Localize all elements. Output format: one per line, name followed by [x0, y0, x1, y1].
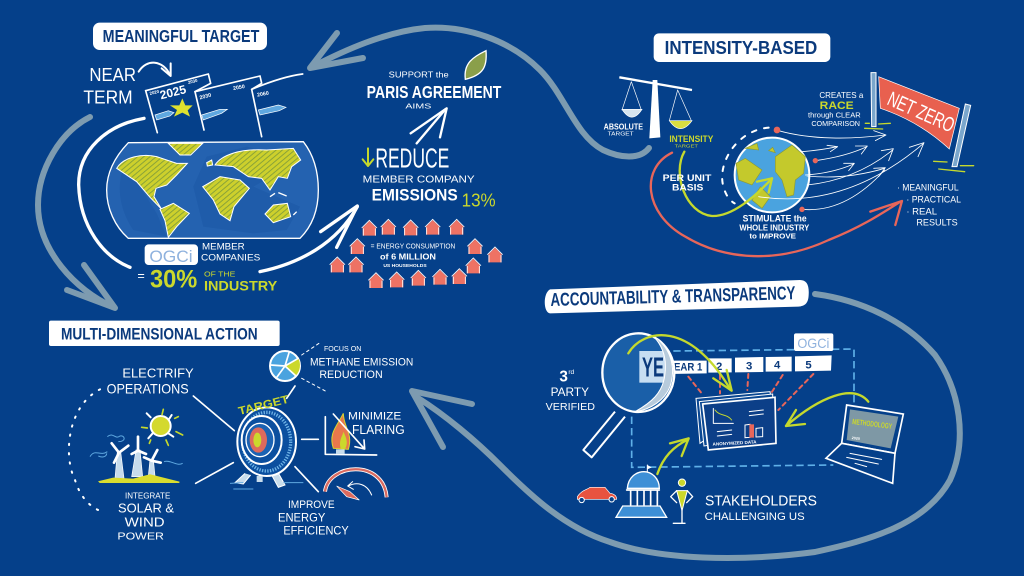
text: electrify operations: OPERATIONS [107, 381, 189, 397]
icon: magnifying glass [583, 333, 674, 457]
text: creates a race through clear comparison: RACE [820, 100, 854, 112]
dashed process box [632, 349, 854, 467]
icon: leaf [465, 51, 486, 79]
dashed orbit [722, 128, 769, 203]
text: improve energy efficiency: EFFICIENCY [283, 524, 349, 538]
title: Accountability & Transparency: ACCOUNTABILITY & TRANSPARENCY [550, 282, 796, 310]
text: member companies: MEMBER [202, 241, 245, 251]
text: meaningful practical real results: RESULTS [916, 218, 958, 228]
text: 3rd party verified [546, 369, 595, 413]
text: intensity target: TARGET [675, 144, 698, 150]
icon: signpost timeline flags: 2030 [199, 93, 212, 101]
text: support the Paris Agreement aims [367, 70, 501, 111]
text: support the Paris Agreement aims: AIMS [405, 102, 431, 111]
icon: signpost timeline flags: 2030 [187, 78, 198, 85]
timeline years: 2 [716, 361, 722, 373]
text: creates a race through clear comparison: COMPARISON [811, 121, 860, 128]
text: focus on methane emission reduction: METHANE EMISSION [310, 357, 413, 369]
text: 3rd party verified: VERIFIED [546, 402, 595, 413]
text: electrify operations: ELECTRIFY [122, 365, 194, 380]
arrow: up to Paris Agreement [411, 108, 447, 143]
arrow: grey loop from Accountability to Multi-Dimensional Action [412, 294, 960, 558]
text: 30% of the industry: INDUSTRY [204, 278, 278, 294]
text: energy consumption: of 6 MILLION [380, 252, 436, 262]
text: electrify operations [107, 365, 194, 397]
text: absolute target [604, 121, 643, 138]
timeline years: 4 [774, 360, 781, 372]
icon: report stack: ANONYMIZED DATA [712, 439, 758, 447]
text: improve energy efficiency [278, 499, 349, 538]
icon: balance scale [619, 77, 692, 138]
title: Accountability & Transparency [545, 280, 809, 313]
icon: signpost timeline flags: 2025 [158, 82, 188, 102]
text: near term: NEAR [89, 64, 136, 85]
text: member companies: COMPANIES [201, 252, 260, 262]
icon: sun [142, 409, 183, 445]
text: meaningful practical real results: · REAL [906, 206, 937, 216]
icon: magnifying glass: YE [642, 352, 664, 383]
title: Meaningful Target [93, 23, 267, 50]
icon: signpost timeline flags: 2020 [149, 89, 160, 96]
text: improve energy efficiency: ENERGY [278, 510, 325, 524]
flag: Net Zero: NET ZERO [884, 88, 958, 137]
text: support the Paris Agreement aims: PARIS AGREEMENT [367, 82, 501, 102]
logo: OGCI small: OGCi [797, 335, 829, 351]
text: per unit basis: BASIS [672, 182, 703, 192]
text: integrate solar and wind power: INTEGRATE [125, 491, 170, 500]
arrows: white race arrows from globe [759, 131, 924, 210]
arrow: near term to 2025 [139, 63, 171, 76]
text: focus on methane emission reduction [310, 344, 413, 381]
text: meaningful practical real results: · PRACTICAL [906, 195, 961, 205]
icon: signpost timeline flags: 2050 [233, 84, 245, 92]
text: meaningful practical real results [897, 183, 961, 228]
icon: houses [330, 219, 503, 288]
dashed red links [688, 374, 813, 410]
arrow: yellow per unit curve [680, 152, 772, 216]
text: minimize flaring: FLARING [352, 423, 405, 437]
title: Multi-Dimensional Action [49, 321, 280, 346]
text: stimulate the whole industry to improve: to IMPROVE [749, 232, 796, 241]
text: energy consumption: = ENERGY CONSUMPTION [371, 244, 455, 251]
text: 3rd party verified: PARTY [551, 385, 589, 399]
text: stimulate the whole industry to improve: WHOLE INDUSTRY [739, 224, 810, 233]
text: support the Paris Agreement aims: SUPPORT the [389, 70, 449, 79]
text: per unit basis [663, 173, 712, 192]
icon: laptop: 2020 [852, 436, 860, 441]
text: per unit basis: PER UNIT [663, 173, 712, 183]
dashed link left [69, 389, 105, 513]
text: energy consumption: US HOUSEHOLDS [383, 263, 427, 268]
timeline years [668, 355, 832, 374]
flag: Net Zero [865, 73, 974, 172]
arrow: yellow from magnifier to report [628, 335, 732, 391]
icon: car [577, 487, 617, 503]
text: 30% of the industry [137, 265, 278, 294]
text: reduce member company emissions 13% [363, 143, 496, 210]
text: minimize flaring [348, 410, 405, 437]
arrow: white curve around the map [79, 118, 144, 267]
text: creates a race through clear comparison: CREATES a [819, 91, 864, 100]
text: member companies [201, 241, 260, 262]
text: integrate solar and wind power: POWER [117, 531, 164, 542]
icon: stakeholder figure [671, 479, 693, 523]
icon: archery target [230, 407, 303, 489]
icon: pie chart [270, 351, 300, 381]
text: stimulate the whole industry to improve: STIMULATE the [743, 214, 807, 224]
panel: intensity-based [604, 33, 974, 256]
text: absolute target: TARGET [608, 132, 634, 138]
text: energy consumption [371, 244, 455, 268]
title: Intensity-Based: INTENSITY-BASED [665, 37, 817, 58]
title: Multi-Dimensional Action: MULTI-DIMENSIONAL ACTION [61, 324, 258, 343]
panel: multi-dimensional action [49, 321, 413, 542]
icon: signpost timeline flags: 2060 [257, 91, 269, 99]
spokes from target [193, 386, 318, 492]
text: minimize flaring: MINIMIZE [348, 410, 402, 422]
logo: OGCI [145, 244, 198, 266]
logo: OGCI: OGCi [149, 247, 193, 266]
text: 3rd party verified: rd [568, 369, 575, 376]
icon: flaring chart [325, 413, 377, 455]
arrow: yellow from laptop to report [786, 393, 868, 426]
timeline years: 3 [746, 360, 752, 372]
text: near term: TERM [83, 86, 133, 107]
text: improve energy efficiency: IMPROVE [288, 499, 335, 511]
text: reduce member company emissions 13%: MEMBER COMPANY [363, 175, 475, 186]
text: focus on methane emission reduction: FOCUS ON [324, 344, 361, 353]
text: 30% of the industry: OF THE [204, 270, 235, 279]
arrow: grey curve from Meaningful Target to Multi-Dimensional Action [38, 117, 115, 308]
text: absolute target: ABSOLUTE [604, 121, 643, 131]
text: creates a race through clear comparison [808, 91, 864, 128]
arrow: yellow from stakeholders to report [657, 438, 689, 474]
text: meaningful practical real results: · MEANINGFUL [897, 183, 959, 193]
panel: accountability and transparency [545, 280, 903, 523]
timeline years: 5 [805, 359, 812, 371]
icon: laptop: METHODOLOGY [852, 417, 893, 431]
icon: report stack [696, 392, 776, 450]
text: 30% of the industry: 30% [150, 265, 197, 293]
text: reduce member company emissions 13%: REDUCE [375, 143, 449, 174]
icon: wind turbines [90, 435, 183, 482]
red dots [774, 127, 818, 212]
text: stakeholders challenging us: STAKEHOLDERS [705, 493, 817, 509]
text: stimulate the whole industry to improve [739, 214, 810, 241]
text: integrate solar and wind power: SOLAR & [118, 502, 175, 516]
title: Meaningful Target: MEANINGFUL TARGET [103, 26, 259, 46]
text: intensity target [669, 134, 713, 150]
panel: meaningful target [79, 23, 503, 294]
map: world map [107, 142, 318, 238]
text: intensity target: INTENSITY [669, 134, 713, 144]
text: focus on methane emission reduction: REDUCTION [319, 369, 383, 381]
icon: government building [616, 465, 667, 517]
text: integrate solar and wind power: WIND [125, 516, 165, 530]
text: reduce member company emissions 13%: 13% [462, 189, 496, 210]
text: integrate solar and wind power [117, 491, 175, 542]
text: reduce member company emissions 13%: EMISSIONS [372, 185, 458, 204]
arrow: white to reduce [260, 206, 357, 272]
arrow: red long curve [651, 153, 902, 256]
arrow: grey curve from Intensity-Based to Meaningful Target [310, 28, 649, 156]
globe [735, 138, 809, 212]
icon: signpost timeline flags [146, 74, 303, 137]
icon: gauge [325, 469, 387, 500]
text: 30% of the industry: = [137, 269, 145, 283]
text: creates a race through clear comparison: through CLEAR [808, 112, 861, 119]
icon: laptop [826, 405, 903, 483]
text: stakeholders challenging us: CHALLENGING US [705, 511, 805, 523]
dotted links from pie [302, 343, 327, 392]
text: near term [83, 64, 136, 107]
text: 3rd party verified: 3 [559, 369, 568, 386]
text: stakeholders challenging us [705, 493, 817, 523]
title: Intensity-Based [654, 33, 830, 62]
timeline years: EAR 1 [674, 362, 702, 374]
text: target label: TARGET [237, 394, 290, 418]
